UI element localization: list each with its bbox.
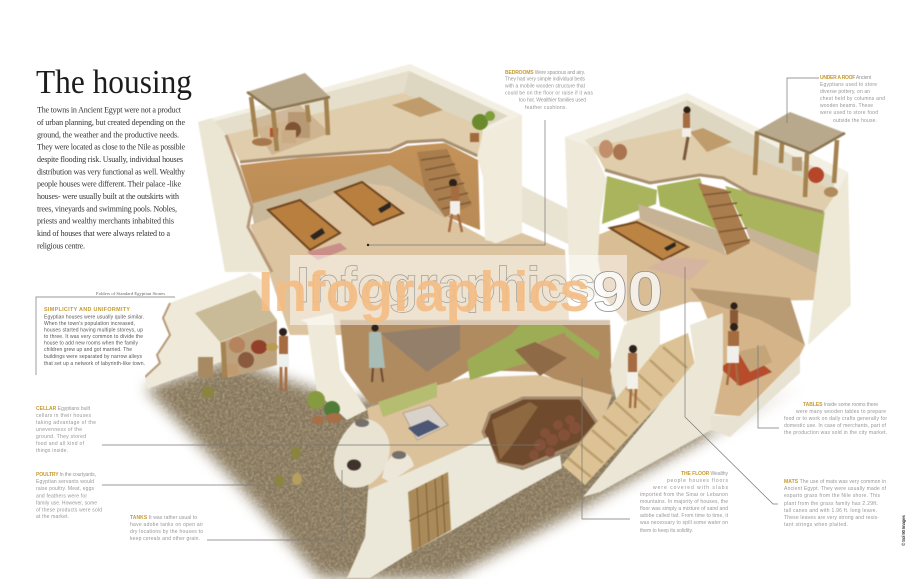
upper right room (565, 93, 851, 345)
callout: mats: These leaves are very strong and resis- (784, 515, 879, 521)
callout: the floor: people houses floors (667, 478, 728, 484)
callout: cellar: food and all kind of (36, 441, 85, 447)
intro text block: The towns in Ancient Egypt were not a product (37, 106, 182, 115)
stone wall band (250, 165, 460, 224)
callout: cellar: unevenness of the (36, 427, 82, 433)
intro text block: ground, the weather and the productive needs. (37, 130, 179, 139)
callout: poultry: family use. However, some (36, 500, 97, 506)
ducks (274, 447, 302, 487)
callout: the floor: them to keep its solidity. (640, 528, 693, 534)
clay oven (334, 419, 390, 488)
callout: poultry: Egyptian servants would (36, 479, 94, 485)
front wall (347, 437, 562, 578)
terracotta pots (599, 140, 627, 160)
callout: mats: Ancient Egypt. They were usually made of (784, 486, 887, 492)
brown plaster wall (240, 143, 480, 230)
intro text block: houses- were usually built at the outskirts with (37, 192, 179, 201)
callout: under a roof: outside the house. (833, 118, 877, 124)
callout: bedrooms: feather cushions. (525, 105, 567, 111)
stair side wall (583, 313, 723, 497)
cellar steps (492, 402, 538, 460)
leader line (102, 484, 277, 486)
callout: under a roof: diverse pottery, on an (820, 89, 870, 95)
green wall center (657, 178, 718, 230)
callout: the floor: was necessary to spill some water on (640, 520, 728, 526)
stairs (698, 183, 750, 255)
callout: mats: tant strings when plaited. (784, 522, 848, 528)
upper left room (198, 64, 570, 335)
panel text: buildings were separated by narrow alleys (44, 354, 142, 360)
green wall left (602, 176, 657, 224)
leader line (207, 470, 342, 540)
standing man (727, 323, 739, 385)
watermark number: 90 (592, 260, 663, 324)
callout: poultry: raise poultry. Meat, eggs (36, 486, 94, 492)
water tank (382, 451, 414, 482)
brown lower room (340, 320, 612, 404)
callout: poultry: of these products were sold (36, 508, 102, 514)
callout: poultry: and feathers were for (36, 494, 87, 500)
intro text block: of urban planning, but created depending on the (37, 118, 185, 127)
low back wall (522, 186, 570, 245)
panel frame (36, 297, 175, 375)
red rug (307, 243, 347, 260)
brown rug (380, 325, 460, 372)
green low wall (378, 382, 437, 417)
callout: mats: esparto grass from the Nile shore. This (784, 493, 880, 499)
mud bricks (690, 128, 732, 152)
title: The housing (36, 64, 192, 101)
callout: cellar: CELLAR Egyptians built (36, 406, 91, 412)
cellar hole (483, 398, 597, 467)
panel text: that set up a network of labyrinth-like town. (44, 361, 145, 367)
callout: cellar (36, 406, 540, 454)
callout: under a roof: wooden beams. These (820, 103, 873, 109)
panel caption: Folders of Standard Egyptian Stones (96, 291, 165, 296)
bed 2 (335, 182, 403, 225)
potted plants (307, 391, 342, 424)
plant (470, 111, 495, 142)
bed (610, 222, 688, 260)
ground (145, 360, 800, 579)
image credit: © Sol 90 Images (900, 515, 906, 546)
back wall right (403, 71, 508, 128)
panel heading: SIMPLICITY AND UNIFORMITY (44, 307, 130, 313)
stone band right (745, 226, 821, 273)
callout: tables: domestic use. In case of merchants, part of (784, 423, 887, 429)
callout: under a roof (787, 75, 885, 124)
lower left wing (145, 273, 289, 398)
wall top (565, 93, 848, 190)
broken floor edge (240, 140, 480, 162)
patterned rug (647, 257, 710, 280)
exterior stairs (562, 333, 695, 485)
man walking (682, 106, 691, 160)
front room wall (711, 355, 800, 437)
leader dot (367, 244, 369, 246)
sand floor (367, 375, 612, 490)
intro text block: despite flooding risk. Usually, individual houses (37, 155, 183, 164)
wall broken edge (145, 303, 170, 377)
pottery jars (529, 415, 581, 460)
stone band (638, 204, 726, 255)
basket (198, 357, 213, 377)
back wall right (683, 100, 835, 192)
leader line (787, 78, 819, 123)
panel text: house to add new rooms when the family (44, 340, 138, 346)
workroom table and rug (720, 345, 772, 386)
back wall (585, 100, 687, 160)
callout: cellar: things inside. (36, 448, 68, 454)
lower floor (250, 183, 570, 335)
storage pots (227, 337, 267, 375)
callout: tanks: TANKS It was rather usual to (130, 515, 197, 521)
callout: bedrooms: could be on the floor or raise if it was (505, 90, 594, 96)
callout: the floor: imported from the Sinai or Lebanon (640, 492, 728, 498)
panel text: Egyptian houses were usually quite similar. (44, 314, 144, 320)
callout: mats (685, 267, 887, 528)
callout: cellar: ground. They stored (36, 434, 86, 440)
callout: poultry: at the market. (36, 514, 69, 520)
wing wall (145, 273, 262, 389)
callout: under a roof: Egyptians used to store (820, 82, 877, 88)
leader line (685, 267, 778, 504)
left wall (565, 137, 607, 300)
right wall (808, 172, 851, 345)
right staircase and workroom (562, 288, 805, 497)
front right wall block (477, 115, 522, 243)
illustration: cutaway Egyptian house (145, 64, 851, 579)
callout: tanks: dry locations by the houses to (130, 529, 203, 535)
rooftop shed (247, 73, 330, 155)
callout: under a roof: UNDER A ROOF Ancient (820, 75, 872, 81)
pillar wall (300, 313, 367, 420)
panel text (44, 314, 145, 367)
green wall back (562, 325, 600, 360)
broken floor edge (605, 170, 823, 212)
callout: tables: were many wooden tables to prepare (796, 409, 886, 415)
intro text block: people houses were different. Their palace -like (37, 180, 181, 189)
panel text: houses started having multiple storeys, up (44, 328, 143, 334)
intro text block: distribution was very functional as well. Wealthy (37, 167, 185, 176)
roof floor (226, 93, 483, 162)
leader line (758, 345, 779, 428)
upper floor (593, 128, 837, 212)
callout: the floor (582, 378, 729, 534)
leader line (582, 378, 630, 519)
callout: tables: food or to work on daily crafts generally for (784, 416, 887, 422)
thatched roof (195, 290, 277, 342)
callout: under a roof: chest held by columns and (820, 96, 885, 102)
panel text: children grew up and got married. The (44, 347, 132, 353)
callout: tables (758, 345, 887, 436)
mosaic rug (403, 405, 448, 440)
intro text block: trees, vineyards and swimming pools. Nobles, (37, 204, 177, 213)
woman (369, 324, 385, 382)
callout: under a roof: were used to store food (820, 110, 878, 116)
back wall left (212, 71, 409, 137)
lower room floor (598, 218, 817, 322)
callout: poultry: POULTRY In the courtyards, (36, 472, 96, 478)
callout: tanks (130, 470, 342, 542)
callout: the floor: mountains. In majority of houses, the (640, 499, 728, 505)
callout: bedrooms: too hot. Wealthier families used (519, 98, 586, 104)
callout: bedrooms: They had very simple individual beds (505, 77, 586, 83)
watermark panel (290, 255, 627, 325)
callout: bedrooms: with a mobile wooden structure that (505, 83, 586, 89)
callout: tanks: keep cereals and other grain. (130, 536, 200, 542)
callout: cellar: cellars in their houses (36, 413, 92, 419)
callout: cellar: taking advantage of the (36, 420, 96, 426)
callout: the floor: adobe called tiaf. From time to time, it (640, 513, 729, 519)
panel text: When the town's population increased, (44, 321, 135, 327)
watermark (258, 255, 663, 325)
callout: poultry (36, 472, 277, 520)
shed post (223, 342, 225, 378)
watermark outline text: Infographics (296, 257, 596, 313)
callout: tables: TABLES Inside some rooms there (803, 402, 878, 408)
watermark orange text: Infographics (258, 260, 590, 324)
callout: mats: plant from the grass family has 2.29ft. (784, 501, 878, 507)
leader line (102, 444, 540, 446)
central lower floor (274, 313, 612, 578)
green wall right (725, 186, 825, 256)
intro text block: They were located as close to the Nile as possible (37, 143, 185, 152)
stairs down (515, 342, 567, 376)
panel: simplicity and uniformity (36, 291, 175, 375)
intro text block: priests and wealthy merchants inhabited this (37, 217, 174, 226)
callout: tables: the production was sold in the city market. (784, 430, 887, 436)
panel text: to three. It was very common to divide the (44, 334, 143, 340)
workroom back wall (690, 288, 805, 345)
callout: the floor: were covered with slabs (653, 485, 728, 491)
stairs (417, 149, 472, 217)
shed interior (222, 320, 277, 378)
callout: the floor: floor was simply a mixture of sand and (640, 506, 728, 512)
duck (202, 386, 214, 398)
callout: mats: MATS The use of mats was very common in (784, 479, 886, 485)
intro text block (37, 106, 185, 251)
seated man (730, 302, 738, 324)
green stepped wall (467, 325, 566, 380)
callout: mats: tall canes and with 1.96 ft. long leave. (784, 508, 877, 514)
intro text block: kind of houses that were always related to a (37, 229, 170, 238)
callout: the floor: THE FLOOR Wealthy (681, 471, 728, 477)
workroom floor (700, 300, 805, 416)
left wall (198, 118, 272, 272)
man with basket (266, 328, 289, 391)
outer wall cap (198, 64, 522, 140)
callout: bedrooms: BEDROOMS Were spacious and airy. (505, 70, 585, 76)
callout: bedrooms (367, 70, 594, 246)
rooftop shed (755, 112, 845, 197)
wooden door (408, 472, 451, 552)
man on stairs (627, 345, 638, 408)
wall behind stairs (610, 310, 660, 403)
callout: tanks: have adobe tanks on open air (130, 522, 203, 528)
person by stairs (449, 179, 462, 232)
intro text block: religious centre. (37, 242, 85, 251)
bed 1 (268, 200, 340, 250)
illustrated house (145, 64, 851, 578)
rooftop mud bricks (392, 97, 443, 117)
wall break edge (226, 135, 272, 272)
leader line (368, 120, 545, 245)
